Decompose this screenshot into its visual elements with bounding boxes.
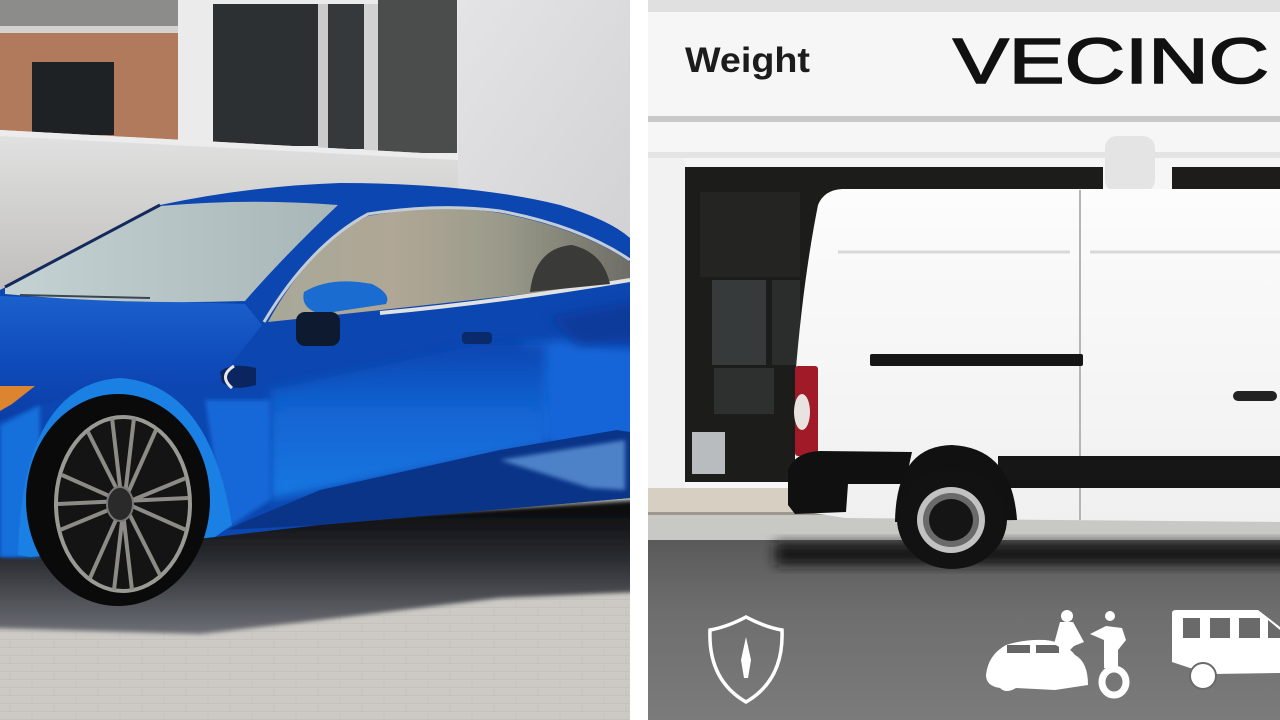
side vent <box>220 366 256 388</box>
front fender <box>205 400 270 530</box>
lower trim <box>998 456 1280 488</box>
front wheel <box>26 394 210 606</box>
building facade <box>648 0 1280 520</box>
side window <box>268 209 630 322</box>
hood <box>0 296 262 420</box>
front bumper <box>0 405 40 557</box>
door handle <box>462 332 492 344</box>
door panel <box>270 345 545 500</box>
sill <box>225 430 630 530</box>
shop window <box>685 167 1280 482</box>
wheel arch <box>18 378 232 557</box>
icon: shield <box>710 617 782 702</box>
windscreen <box>5 202 338 302</box>
van wheel <box>897 487 1007 569</box>
side rail <box>870 354 1083 366</box>
road <box>648 540 1280 720</box>
pavement <box>648 488 1280 540</box>
icon: car and scooter rider <box>986 610 1126 695</box>
left panel: blue coupe scene <box>0 0 640 720</box>
icon: minibus <box>1172 610 1280 689</box>
mirror <box>303 281 387 314</box>
background: house and walls <box>0 0 630 500</box>
ground: paved driveway <box>0 500 640 720</box>
van body <box>788 189 1280 522</box>
van shadow <box>775 543 1280 565</box>
seat silhouette <box>530 245 610 292</box>
tail light <box>795 366 818 456</box>
door handle <box>1233 391 1277 401</box>
rear quarter <box>524 336 630 442</box>
headlight <box>0 386 35 411</box>
sign text: Weight: Weight <box>685 41 810 80</box>
sign text: VECINC: VECINC <box>953 25 1269 97</box>
right panel: white van scene <box>648 0 1280 720</box>
car body <box>0 183 640 557</box>
